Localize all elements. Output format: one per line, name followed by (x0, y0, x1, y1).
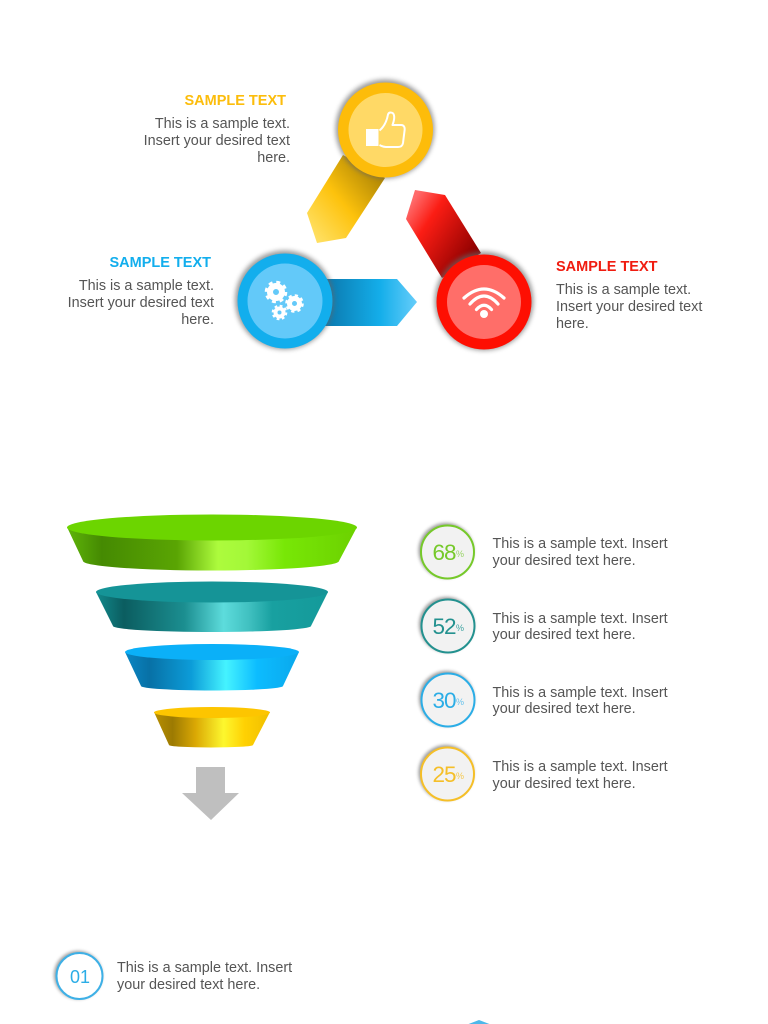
gauge: 30%: % (456, 697, 464, 707)
text block: blue: This is a sample text. (79, 278, 214, 294)
text block: yellow: Insert your desired text (144, 133, 290, 149)
text block: red: here. (556, 316, 589, 332)
gauge: 68%: % (456, 549, 464, 559)
text: 52% description: your desired text here. (492, 627, 636, 643)
text block: red: Insert your desired text (556, 299, 702, 315)
gauge: 25%: % (456, 771, 464, 781)
numbered badge: 01: 01 (70, 967, 90, 987)
text block: yellow (144, 93, 290, 166)
text block: red: This is a sample text. (556, 282, 691, 298)
chart: funnel (67, 514, 357, 820)
funnel tier: yellow (154, 707, 270, 748)
icon: gears badge (235, 250, 334, 350)
text block: yellow: This is a sample text. (155, 116, 290, 132)
arrow: grey down (182, 767, 239, 820)
text: 25% description: your desired text here. (492, 776, 636, 792)
text: item 01 description (117, 960, 292, 993)
text: item 01 description: This is a sample text. Insert (117, 960, 292, 976)
icon: thumbs up badge (336, 80, 434, 178)
text: 52% description (492, 611, 668, 643)
gauge: 25%: 25 (432, 762, 456, 787)
text: 68% description: This is a sample text. Insert (492, 536, 668, 552)
numbered badge: 01 (54, 951, 102, 999)
funnel tier: teal (96, 582, 328, 632)
text: 25% description: This is a sample text. Insert (492, 759, 668, 775)
funnel tier: green (67, 514, 357, 570)
funnel tier: blue (125, 644, 299, 690)
text block: yellow: here. (257, 150, 290, 166)
text: 68% description (492, 536, 668, 569)
gauge: 30%: 30 (432, 688, 456, 713)
text block: yellow: SAMPLE TEXT (184, 93, 286, 109)
icon: wifi badge (434, 252, 534, 350)
text: item 01 description: your desired text here. (117, 977, 260, 993)
gauge: 52%: % (456, 623, 464, 633)
text: 25% description (492, 759, 668, 792)
text: 30% description (492, 685, 668, 717)
shape: blue hexagon top (466, 1020, 492, 1024)
gauge: 52% (419, 597, 474, 652)
text block: red (556, 259, 702, 332)
text block: blue: SAMPLE TEXT (109, 255, 211, 271)
arrow: yellow ribbon (307, 155, 385, 243)
text: 68% description: your desired text here. (492, 553, 636, 569)
text block: blue: Insert your desired text (68, 295, 214, 311)
text: 30% description: your desired text here. (492, 701, 636, 717)
gauge: 30% (419, 671, 474, 726)
gauge: 68%: 68 (432, 540, 456, 565)
text block: blue (68, 255, 214, 328)
text block: red: SAMPLE TEXT (556, 259, 658, 275)
gauge: 52%: 52 (432, 614, 456, 639)
text: 52% description: This is a sample text. Insert (492, 611, 668, 627)
arrow: blue ribbon (325, 279, 417, 326)
gauge: 68% (418, 523, 474, 578)
text block: blue: here. (181, 312, 214, 328)
text: 30% description: This is a sample text. Insert (492, 685, 668, 701)
arrow: red ribbon (406, 190, 481, 278)
panel: cycle diagram (235, 80, 534, 350)
gauge: 25% (418, 745, 474, 800)
